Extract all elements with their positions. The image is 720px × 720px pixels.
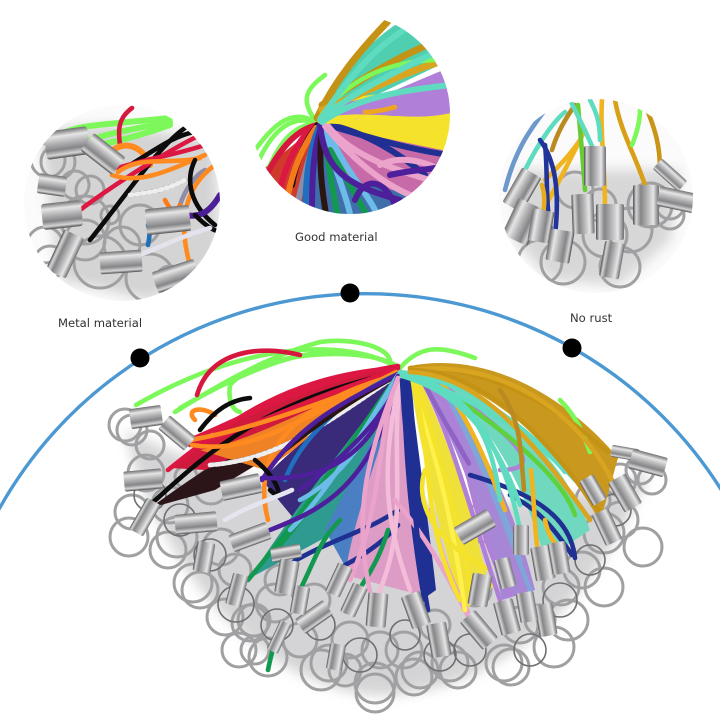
cords: left fan [136, 341, 475, 670]
metal haze behind rings [125, 430, 650, 695]
marker: middle dot [340, 284, 360, 302]
label: good material: Good material [295, 230, 378, 244]
label: no rust: No rust [570, 311, 613, 325]
marker: left dot [130, 348, 150, 368]
marker: right dot [562, 338, 582, 358]
metal crimps [123, 405, 668, 671]
arc: blue timeline curve [0, 294, 720, 511]
cords: centre and right fan [350, 368, 612, 620]
label: metal material: Metal material [58, 316, 142, 330]
cord mass: coloured wedges [150, 363, 618, 612]
panel: metal material close-up [24, 105, 220, 302]
panel: no rust close-up [499, 99, 700, 293]
key rings [109, 409, 666, 712]
panel: good material close-up [255, 14, 455, 218]
main photo: bundle of coloured cords with metal key rings [109, 341, 668, 712]
